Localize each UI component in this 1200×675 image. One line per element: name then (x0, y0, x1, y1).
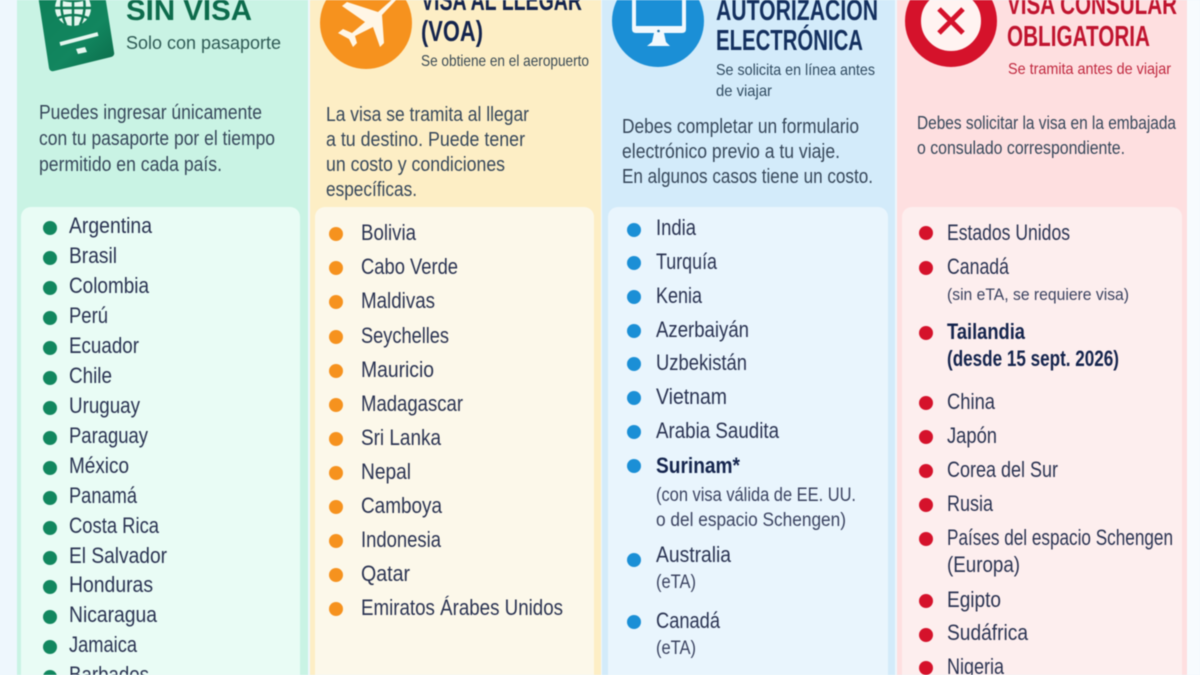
card: visa consular countries: (desde 15 sept. 2026) (947, 346, 1119, 371)
card: sin visa countries: Colombia (69, 273, 150, 298)
card: autorización electrónica countries: (con visa válida de EE. UU. (656, 485, 856, 506)
card: visa al llegar countries: Mauricio (361, 357, 434, 382)
card: visa consular countries: (Europa) (947, 552, 1020, 577)
card: visa consular countries: Tailandia (947, 319, 1026, 344)
subheading: se solicita en línea: Se solicita en línea antes (716, 62, 875, 79)
card: autorización electrónica countries: Surinam* (656, 453, 740, 478)
card: sin visa countries: Brasil (69, 243, 117, 268)
card: autorización electrónica countries: Vietnam (656, 384, 727, 409)
card: sin visa countries: El Salvador (69, 543, 167, 568)
panel: autorización electrónica (602, 0, 895, 675)
card: visa al llegar countries: Maldivas (361, 288, 435, 313)
card: sin visa countries: Jamaica (69, 632, 138, 657)
card: sin visa countries: Uruguay (69, 393, 140, 418)
card: sin visa countries: México (69, 453, 129, 478)
card: visa consular countries: Egipto (947, 587, 1001, 612)
subheading: se solicita en línea (716, 62, 875, 100)
card: sin visa countries: Perú (69, 303, 108, 328)
subheading: solo con pasaporte: Solo con pasaporte (126, 33, 281, 53)
heading: autorización electrónica: ELECTRÓNICA (716, 23, 863, 57)
description: autorización electrónica: electrónico previo a tu viaje. (622, 141, 840, 163)
card: autorización electrónica countries (608, 207, 888, 675)
card: visa al llegar countries: Seychelles (361, 323, 449, 348)
description: sin visa: Puedes ingresar únicamente (39, 102, 262, 124)
card: autorización electrónica countries: (eTA) (656, 638, 696, 659)
card: autorización electrónica countries: Canadá (656, 608, 721, 633)
card: visa consular countries: Sudáfrica (947, 620, 1029, 645)
card: sin visa countries: Argentina (69, 213, 153, 238)
subheading: se solicita en línea: de viajar (716, 83, 773, 100)
description: visa al llegar: específicas. (326, 179, 417, 201)
heading: autorización electrónica (716, 0, 878, 57)
subheading: se tramita antes de viajar: Se tramita antes de viajar (1008, 61, 1172, 78)
card: visa consular countries: Rusia (947, 491, 994, 516)
card: visa consular countries: China (947, 389, 996, 414)
card: sin visa countries: Costa Rica (69, 513, 160, 538)
card: autorización electrónica countries: (eTA) (656, 572, 696, 593)
card: visa consular countries: Estados Unidos (947, 220, 1070, 245)
subheading: se obtiene en el aeropuerto: Se obtiene en el aeropuerto (421, 53, 589, 70)
card: visa consular countries: Japón (947, 423, 997, 448)
card: sin visa countries: Nicaragua (69, 602, 158, 627)
card: autorización electrónica countries: Australia (656, 542, 732, 567)
description: autorización electrónica: En algunos casos tiene un costo. (622, 166, 873, 188)
description: visa consular: o consulado correspondiente. (917, 138, 1125, 158)
card: visa consular countries: Canadá (947, 254, 1010, 279)
description: sin visa (39, 102, 275, 176)
card: visa consular countries (902, 207, 1182, 675)
heading: visa al llegar (voa) (421, 0, 582, 48)
card: autorización electrónica countries: o del espacio Schengen) (656, 510, 846, 531)
panel: visa consular obligatoria (897, 0, 1187, 675)
card: visa consular countries: Corea del Sur (947, 457, 1058, 482)
card: visa al llegar countries: Nepal (361, 459, 411, 484)
icon: passport (38, 0, 114, 71)
card: visa al llegar countries: Camboya (361, 493, 443, 518)
description: autorización electrónica: Debes completar un formulario (622, 116, 859, 138)
card: autorización electrónica countries: Arabia Saudita (656, 418, 780, 443)
description: visa al llegar: a tu destino. Puede tener (326, 129, 525, 151)
card: autorización electrónica countries: Uzbekistán (656, 350, 747, 375)
panel: visa al llegar (310, 0, 601, 675)
card: autorización electrónica countries: Kenia (656, 283, 703, 308)
card: visa al llegar countries: Bolivia (361, 220, 417, 245)
heading: visa al llegar (voa): (VOA) (421, 16, 483, 48)
icon: red circle with x (913, 0, 989, 59)
card: autorización electrónica countries: Azerbaiyán (656, 317, 749, 342)
heading: visa consular obligatoria (1007, 0, 1177, 53)
card: sin visa countries: Chile (69, 363, 112, 388)
card: sin visa countries (21, 207, 300, 675)
description: autorización electrónica (622, 116, 873, 188)
description: visa al llegar: un costo y condiciones (326, 154, 505, 176)
card: visa al llegar countries: Madagascar (361, 391, 463, 416)
description: visa al llegar: La visa se tramita al llegar (326, 104, 529, 126)
panel: sin visa (17, 0, 308, 675)
description: visa al llegar (326, 104, 529, 201)
icon: computer monitor (612, 0, 704, 67)
card: sin visa countries: Paraguay (69, 423, 148, 448)
description: sin visa: con tu pasaporte por el tiempo (39, 128, 275, 150)
card: visa al llegar countries: Emiratos Árabes Unidos (361, 595, 563, 620)
card: visa al llegar countries: Indonesia (361, 527, 442, 552)
card: visa al llegar countries (315, 207, 594, 675)
card: visa al llegar countries: Qatar (361, 561, 410, 586)
card: sin visa countries: Honduras (69, 572, 153, 597)
card: autorización electrónica countries: India (656, 215, 697, 240)
card: visa al llegar countries: Cabo Verde (361, 254, 458, 279)
description: sin visa: permitido en cada país. (39, 154, 222, 176)
card: autorización electrónica countries: Turquía (656, 249, 718, 274)
card: sin visa countries: Panamá (69, 483, 138, 508)
description: visa consular (917, 113, 1177, 158)
icon: airplane (320, 0, 412, 69)
card: sin visa countries: Ecuador (69, 333, 139, 358)
card: visa consular countries: (sin eTA, se requiere visa) (947, 285, 1129, 304)
card: visa al llegar countries: Sri Lanka (361, 425, 442, 450)
